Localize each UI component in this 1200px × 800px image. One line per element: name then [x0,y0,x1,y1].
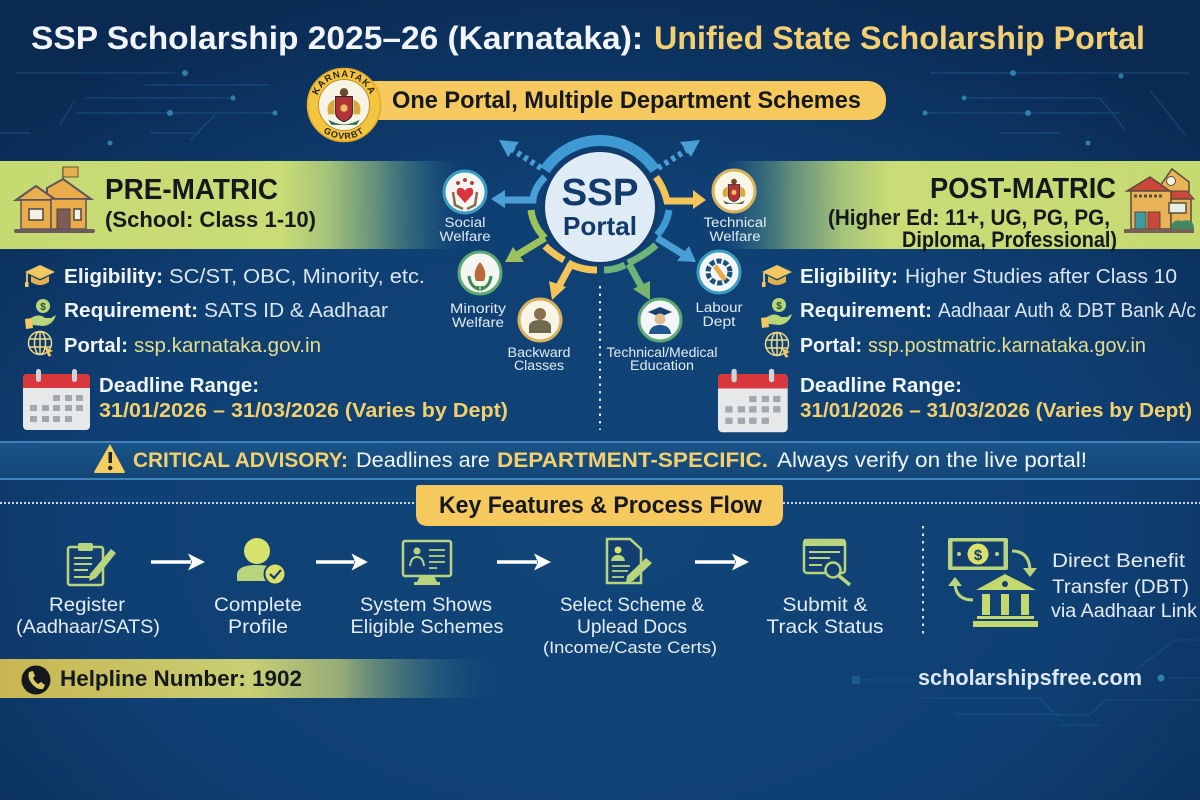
title: Unified State Scholarship Portal [654,20,1145,56]
panel: pre-matric band: (School: Class 1-10) [105,207,316,232]
panel: pre-matric details [23,265,508,430]
dept: minority welfare: Minority [450,301,506,316]
panel: pre-matric details: Eligibility: [64,266,163,288]
heading: key features: Key Features & Process Flow [439,492,762,519]
callout: critical advisory [0,441,1200,480]
arcs and arrows [491,140,706,300]
icon: user check [237,538,286,584]
dept: technical medical education: Education [630,358,694,373]
icon: graduation cap [25,265,55,287]
arrow: step 3 to 4 [497,554,551,570]
icon: globe [766,332,790,358]
icon: calendar [718,369,788,432]
icon: money hand [25,299,56,329]
panel: pre-matric details: Deadline Range: [99,375,259,397]
panel: post-matric details: Portal: [800,335,862,357]
dept: social welfare [440,171,490,244]
step: select scheme: (Income/Caste Certs) [543,638,717,657]
dept: technical welfare [704,170,767,244]
icon: globe [28,332,53,356]
step: register: (Aadhaar/SATS) [16,616,160,638]
panel: post-matric band: POST-MATRIC [930,173,1116,205]
icon: Karnataka seal: KARNATAKA [312,70,375,95]
step: select scheme: Uplead Docs [577,616,687,638]
dept: backward classes [508,299,570,373]
dept: minority welfare: Welfare [452,315,504,330]
icon: school house [14,167,95,233]
step: complete profile: Profile [228,616,288,638]
panel: post-matric band: Diploma, Professional) [902,227,1117,252]
icon: money hand [761,298,792,328]
diagram: SSP portal hub [491,140,706,300]
title: SSP Scholarship 2025–26 (Karnataka): [31,20,643,56]
dept: technical medical education: Technical/Medical [606,345,718,360]
icon: Karnataka seal [306,68,382,142]
helpline band [0,659,500,698]
icon: calendar [23,369,90,430]
step: system shows: Eligible Schemes [350,616,504,638]
heading: key features [416,485,783,526]
dept: labour: Dept [702,314,736,329]
step: system shows [350,541,504,638]
icon: monitor [403,541,451,585]
panel: post-matric details: Deadline Range: [800,375,962,397]
helpline band: Helpline Number: 1902 [60,666,302,691]
callout: critical advisory: DEPARTMENT-SPECIFIC. [497,449,768,472]
panel: pre-matric details: Requirement: [64,300,198,322]
dept: backward classes: Backward [508,345,570,360]
icon: Karnataka seal: GOVRBT [324,127,362,140]
step: system shows: System Shows [360,594,492,616]
banner: one portal: One Portal, Multiple Department Schemes [392,87,861,114]
callout: critical advisory: CRITICAL ADVISORY: [133,449,348,472]
panel: pre-matric details: 31/01/2026 – 31/03/2026 (Varies by Dept) [99,400,508,422]
panel: direct benefit transfer: Transfer (DBT) [1052,576,1189,598]
arrow: step 2 to 3 [316,554,368,570]
dept: minority welfare [450,252,506,330]
panel: post-matric details: Higher Studies after Class 10 [905,266,1177,288]
panel: direct benefit transfer: via Aadhaar Link [1051,600,1197,622]
step: register [16,543,160,638]
step: select scheme [543,539,717,657]
title [31,20,1145,56]
icon: document pen [607,539,652,583]
icon: warning triangle [94,444,125,473]
panel: post-matric band: (Higher Ed: 11+, UG, PG, PG, [828,205,1110,230]
step: submit and track: Submit & [782,594,868,616]
step: register: Register [49,594,126,616]
icon: clipboard [68,543,116,585]
arrow: step 4 to 5 [695,554,749,570]
hub circle: Portal [563,211,637,241]
dept: technical medical education [606,299,718,373]
step: complete profile [214,538,302,638]
website label: scholarshipsfree.com [918,665,1142,690]
icon: college building [1124,169,1194,233]
panel: post-matric details [718,265,1196,432]
callout: critical advisory: Deadlines are [356,449,490,472]
hub circle [545,152,655,262]
panel: post-matric details: Eligibility: [800,266,898,288]
dept: labour: Labour [696,300,743,315]
icon: money and bank: $ [974,547,983,564]
panel: pre-matric band: PRE-MATRIC [105,174,278,206]
icon: form with magnifier [804,539,850,585]
dept: labour [696,251,743,329]
panel: direct benefit transfer: Direct Benefit [1052,550,1186,572]
step: submit and track: Track Status [766,616,884,638]
callout: critical advisory: Always verify on the live portal! [777,449,1087,472]
panel: pre-matric details: ssp.karnataka.gov.in [134,335,321,357]
arrow: step 1 to 2 [151,554,205,570]
panel: post-matric details: ssp.postmatric.karnataka.gov.in [868,335,1146,357]
dept: social welfare: Welfare [440,229,490,244]
hub circle: SSP [562,172,638,214]
panel: post-matric details: Requirement: [800,300,932,322]
banner: one portal [345,81,886,120]
panel: post-matric band [715,161,1200,252]
panel: pre-matric details: SATS ID & Aadhaar [204,300,388,322]
panel: post-matric details: Aadhaar Auth & DBT Bank A/c [938,300,1196,322]
icon: graduation cap [762,265,792,287]
panel: post-matric details: 31/01/2026 – 31/03/2026 (Varies by Dept) [800,400,1192,422]
panel: pre-matric details: SC/ST, OBC, Minority, etc. [169,266,425,288]
icon: phone [22,666,50,694]
dept: technical welfare: Technical [704,215,767,230]
step: select scheme: Select Scheme & [560,594,704,616]
step: submit and track [766,539,884,638]
panel: direct benefit transfer [948,538,1197,627]
dept: social welfare: Social [444,215,486,230]
panel: pre-matric band [0,161,470,249]
dept: backward classes: Classes [514,358,564,373]
step: complete profile: Complete [214,594,302,616]
panel: pre-matric details: Portal: [64,335,128,357]
icon: money and bank [948,538,1038,627]
dept: technical welfare: Welfare [710,229,760,244]
